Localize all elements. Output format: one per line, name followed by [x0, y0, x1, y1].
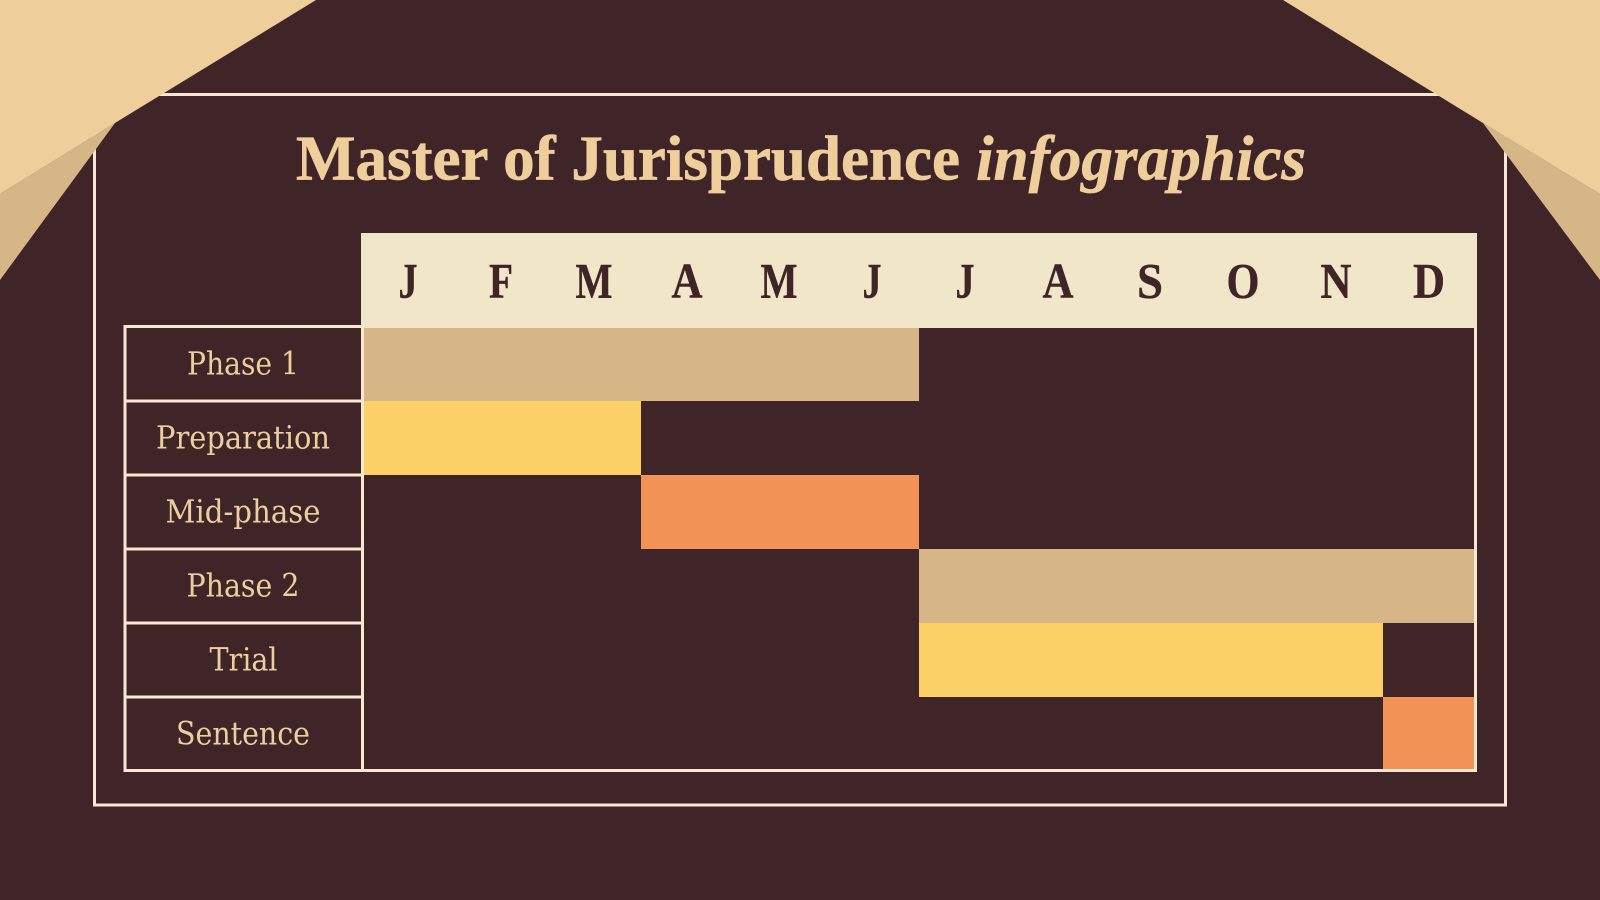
month header: O	[1226, 252, 1260, 308]
row labels: Mid-phase	[166, 492, 320, 530]
title: infographics	[976, 122, 1306, 194]
month header: D	[1413, 252, 1445, 308]
month header: M	[576, 252, 612, 308]
month header: J	[862, 252, 882, 308]
gantt chart	[124, 233, 1477, 772]
month header: M	[760, 252, 798, 308]
month header: S	[1137, 252, 1163, 308]
month header: A	[1042, 252, 1074, 308]
grid lines	[124, 325, 1477, 772]
month header	[361, 233, 1477, 328]
month header: N	[1320, 252, 1352, 308]
row labels: Phase 1	[187, 344, 299, 382]
corner shape: top left	[0, 0, 316, 280]
title	[296, 122, 1306, 194]
title: Master of Jurisprudence	[296, 122, 960, 194]
outer frame	[94, 94, 1506, 805]
month header: A	[672, 252, 702, 308]
bars	[364, 328, 1474, 770]
month header: J	[398, 252, 418, 308]
row labels: Trial	[210, 640, 278, 678]
row labels: Preparation	[156, 418, 330, 456]
row labels	[156, 344, 330, 752]
row labels: Phase 2	[186, 566, 300, 604]
month header: F	[489, 252, 513, 308]
corner shape: top right	[1283, 0, 1600, 280]
month header: J	[956, 252, 974, 308]
row labels: Sentence	[176, 714, 310, 752]
